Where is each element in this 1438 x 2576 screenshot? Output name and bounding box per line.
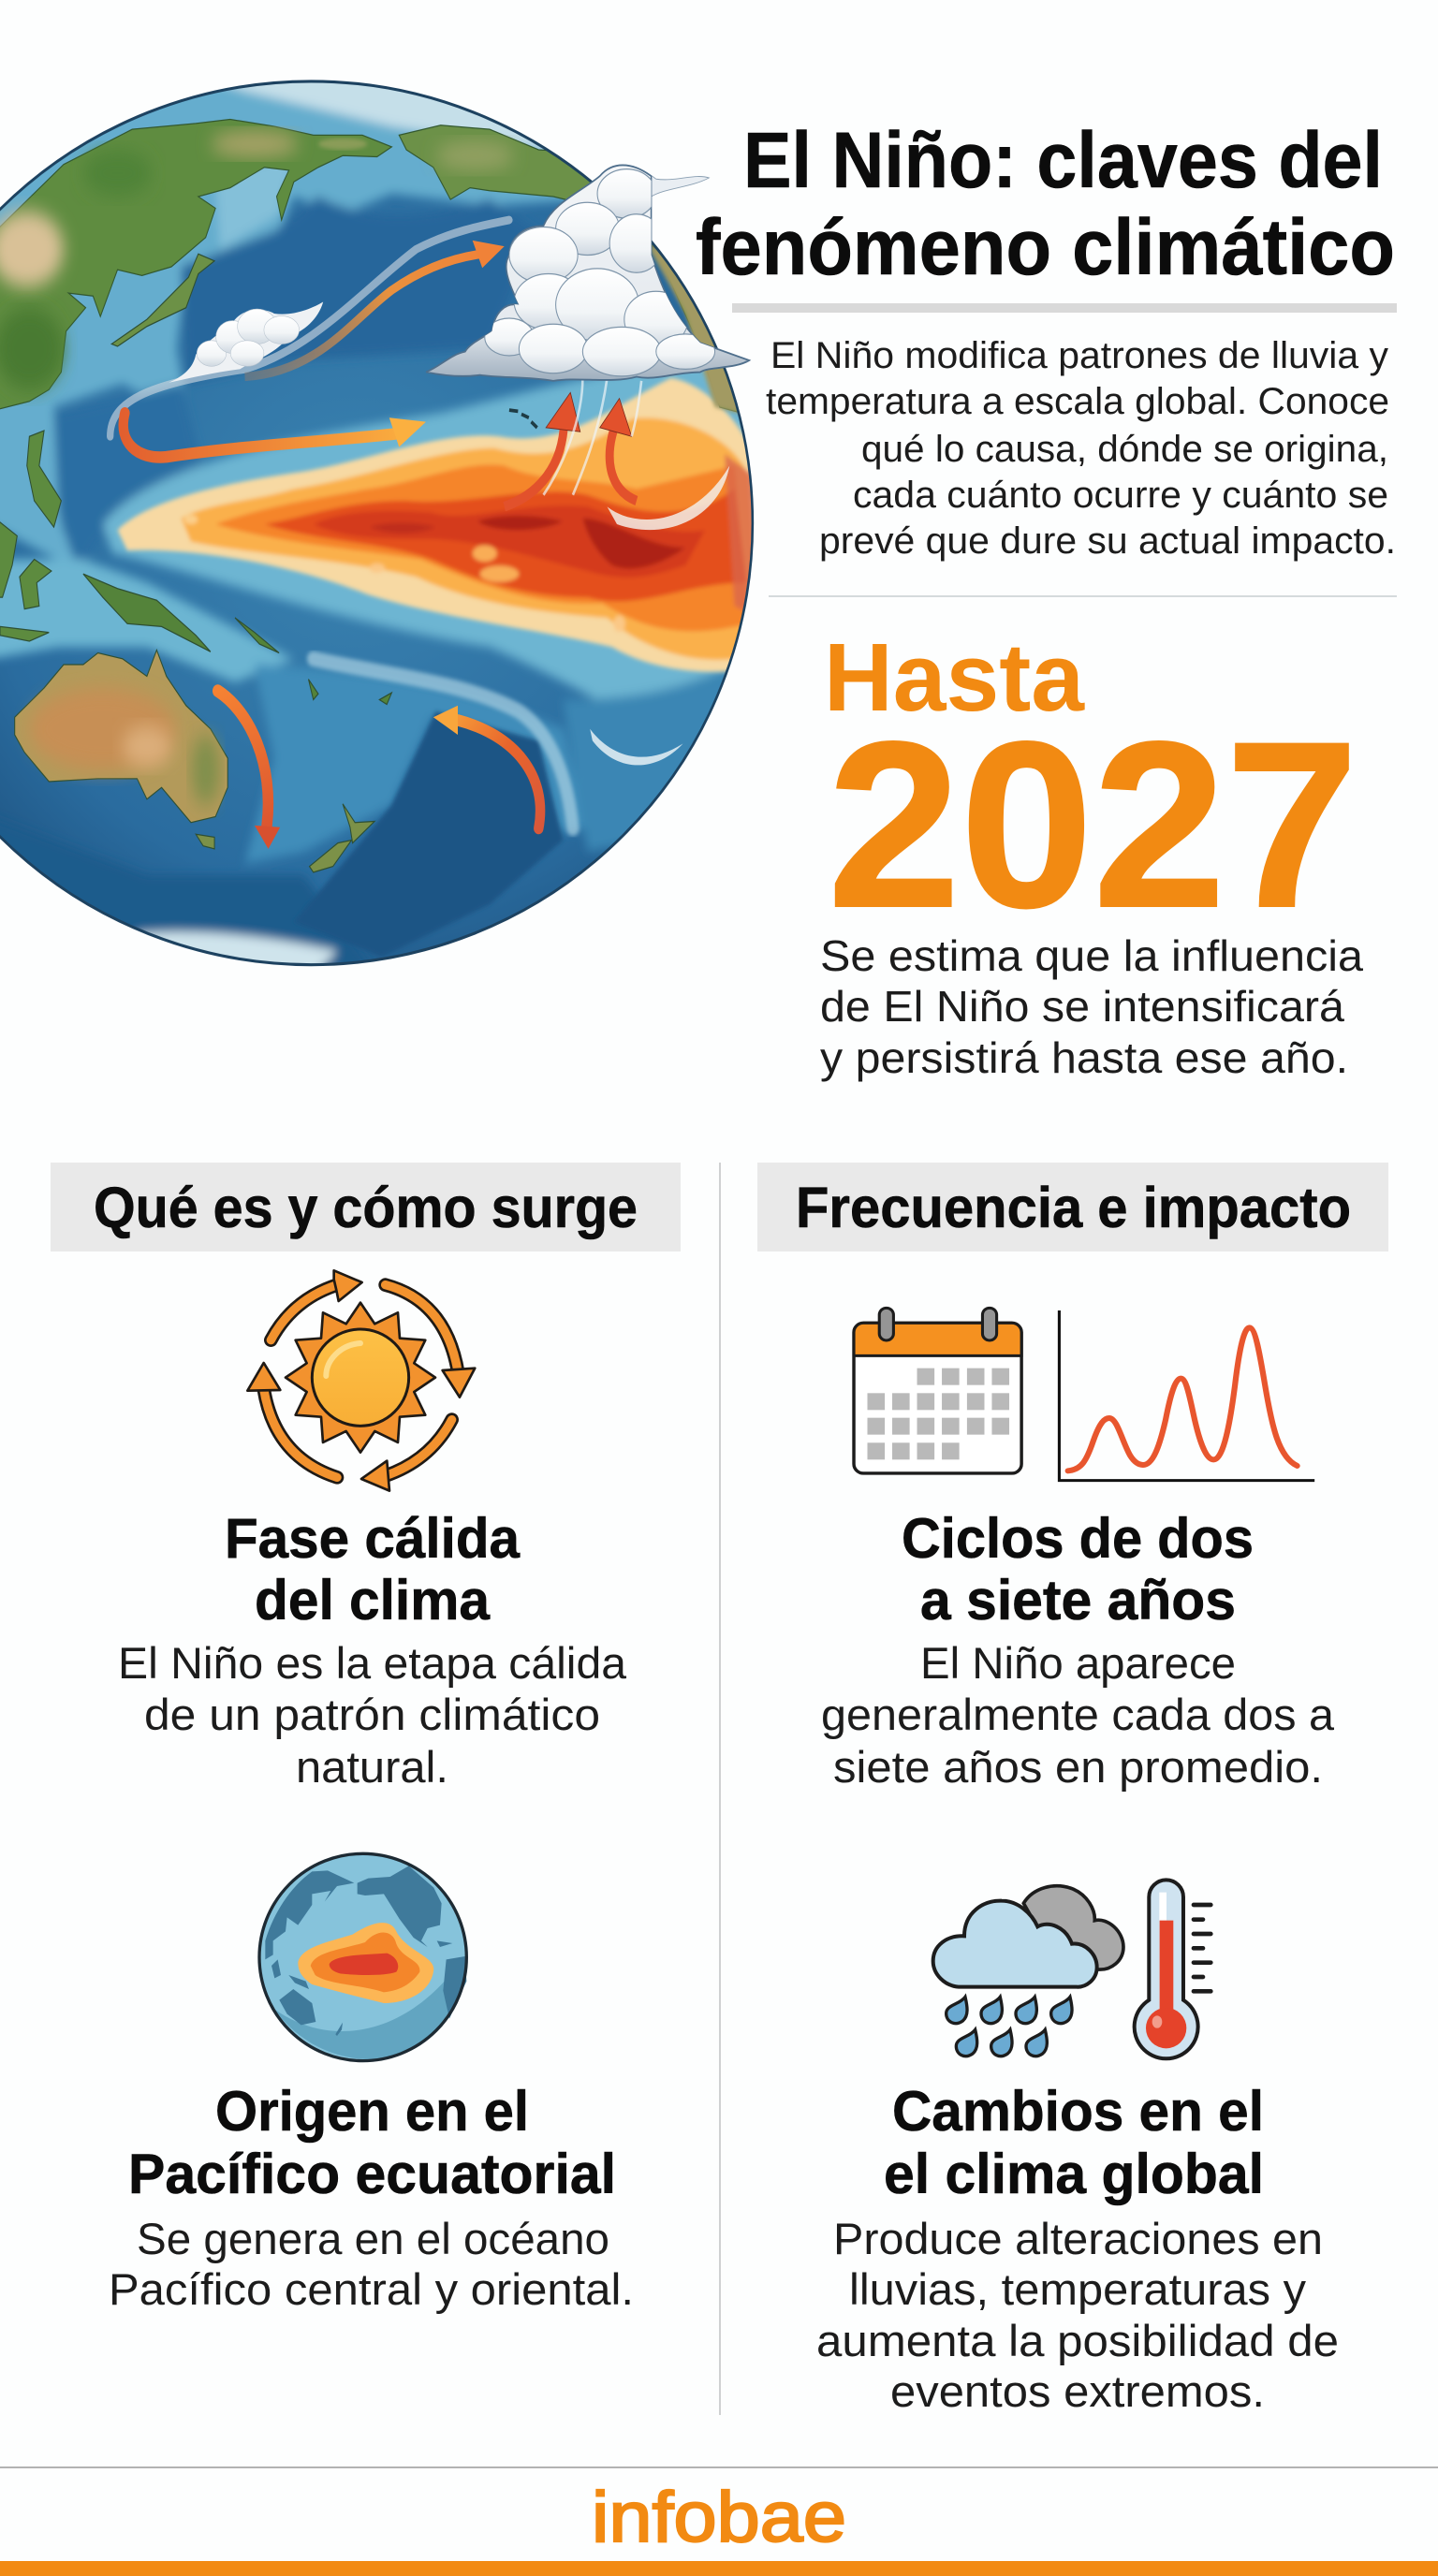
footer line bbox=[0, 2466, 1438, 2468]
arrow: South Pacific gyre bbox=[433, 706, 540, 828]
heading: ciclos bbox=[902, 1507, 1254, 1632]
icon: rain cloud and thermometer bbox=[933, 1880, 1211, 2058]
text: ciclos: generalmente cada dos a bbox=[821, 1690, 1335, 1739]
footer bar bbox=[0, 2561, 1438, 2576]
title: fenómeno climático bbox=[696, 203, 1395, 291]
small cloud bbox=[169, 301, 323, 383]
land: Philippines and Indonesia bbox=[27, 431, 61, 527]
heading: cambios bbox=[884, 2080, 1264, 2205]
big number callout: 2027 bbox=[828, 694, 1358, 957]
heading: origen bbox=[128, 2080, 616, 2205]
warm water tongue bbox=[118, 378, 764, 672]
section header: left: Qué es y cómo surge bbox=[94, 1176, 638, 1239]
big number callout: Se estima que la influencia bbox=[820, 931, 1363, 980]
big number callout: y persistirá hasta ese año. bbox=[820, 1033, 1348, 1082]
text: origen: Pacífico central y oriental. bbox=[109, 2264, 634, 2314]
text: origen bbox=[109, 2214, 634, 2314]
land: Japan bbox=[111, 254, 214, 346]
rain streaks bbox=[544, 378, 641, 495]
currents: pale streaks bbox=[110, 220, 573, 828]
land: Asia bbox=[0, 120, 764, 872]
heading: fase cálida: del clima bbox=[255, 1569, 491, 1632]
ocean bbox=[0, 185, 694, 960]
land: Tasmania and New Zealand bbox=[196, 834, 214, 849]
text: origen: Se genera en el océano bbox=[137, 2214, 609, 2263]
red updraft arrows bbox=[505, 392, 637, 506]
section header: right bbox=[757, 1163, 1388, 1251]
heading: origen: Origen en el bbox=[215, 2080, 529, 2143]
text: fase cálida: natural. bbox=[296, 1742, 448, 1792]
islands dots bbox=[509, 410, 537, 428]
section header: left bbox=[51, 1163, 681, 1251]
big storm cloud bbox=[426, 165, 749, 381]
icon: small globe with warm pool bbox=[259, 1853, 466, 2061]
icon: sun with cycle arrows bbox=[247, 1270, 475, 1491]
intro text: El Niño modifica patrones de lluvia y bbox=[770, 335, 1388, 376]
heading: fase cálida: Fase cálida bbox=[225, 1507, 521, 1570]
arrow: westerly return current bbox=[124, 413, 426, 457]
land: Alaska and North America bbox=[399, 125, 764, 419]
arrow: east Australian current bbox=[218, 691, 280, 849]
intro text: cada cuánto ocurre y cuánto se bbox=[853, 475, 1388, 516]
big number callout bbox=[820, 623, 1363, 1082]
text: fase cálida bbox=[118, 1638, 627, 1792]
text: ciclos bbox=[821, 1638, 1335, 1792]
title bbox=[696, 116, 1395, 291]
intro text: prevé que dure su actual impacto. bbox=[819, 520, 1396, 562]
text: cambios: aumenta la posibilidad de bbox=[816, 2316, 1339, 2365]
text: cambios: eventos extremos. bbox=[890, 2366, 1265, 2416]
big number callout: de El Niño se intensificará bbox=[820, 982, 1344, 1031]
intro text bbox=[766, 335, 1396, 562]
intro text: temperatura a escala global. Conoce bbox=[766, 381, 1389, 422]
heading: cambios: el clima global bbox=[884, 2143, 1264, 2205]
text: cambios: lluvias, temperaturas y bbox=[849, 2264, 1307, 2314]
big number callout: Hasta bbox=[824, 623, 1085, 731]
text: cambios bbox=[816, 2214, 1339, 2416]
heading: ciclos: Ciclos de dos bbox=[902, 1507, 1254, 1570]
text: fase cálida: de un patrón climático bbox=[144, 1690, 600, 1739]
intro text: qué lo causa, dónde se origina, bbox=[861, 429, 1388, 470]
heading: fase cálida bbox=[225, 1507, 521, 1632]
chart: rising peaks bbox=[1059, 1310, 1314, 1481]
text: ciclos: El Niño aparece bbox=[920, 1638, 1236, 1688]
logo: infobae: infobae bbox=[592, 2478, 846, 2557]
globe illustration bbox=[0, 56, 764, 992]
globe rim bbox=[0, 81, 753, 965]
heading: ciclos: a siete años bbox=[920, 1569, 1236, 1632]
text: cambios: Produce alteraciones en bbox=[833, 2214, 1323, 2263]
icon: calendar bbox=[854, 1308, 1021, 1473]
section header: right: Frecuencia e impacto bbox=[796, 1176, 1351, 1239]
text: fase cálida: El Niño es la etapa cálida bbox=[118, 1638, 627, 1688]
text: ciclos: siete años en promedio. bbox=[833, 1742, 1323, 1792]
arrow: north Pacific current bbox=[245, 241, 505, 376]
land: Australia bbox=[15, 650, 227, 823]
heading: cambios: Cambios en el bbox=[892, 2080, 1264, 2143]
title: El Niño: claves del bbox=[743, 116, 1383, 204]
heading: origen: Pacífico ecuatorial bbox=[128, 2143, 616, 2205]
